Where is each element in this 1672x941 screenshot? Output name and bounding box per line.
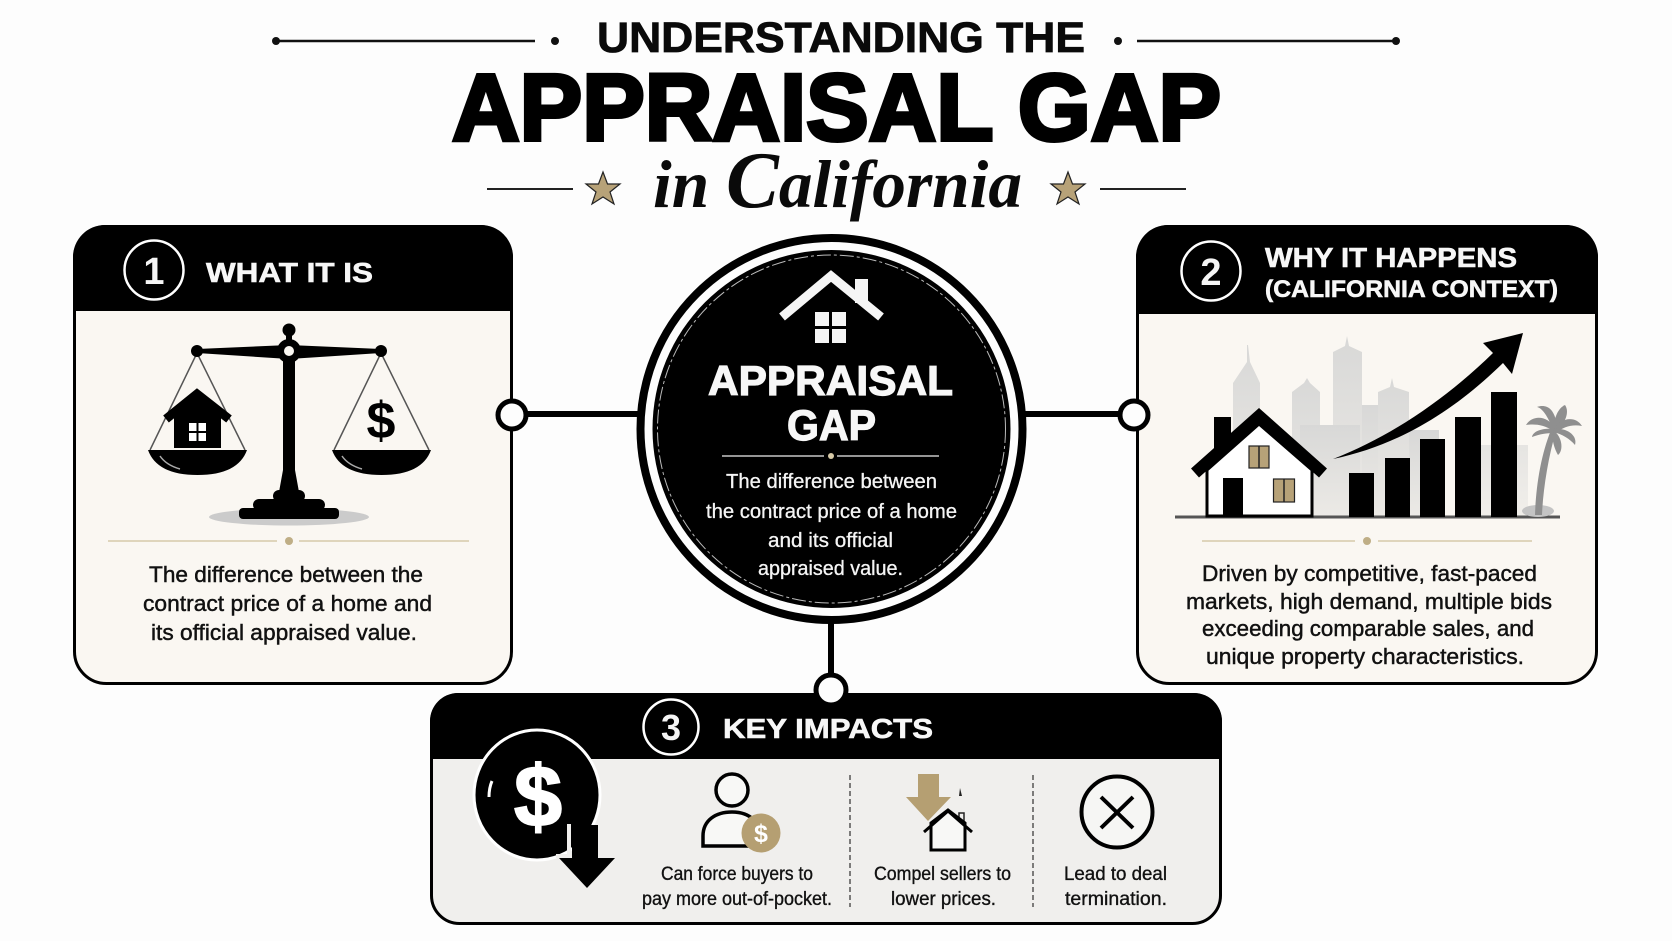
connector node: bottom [816,675,846,705]
dashed separators [850,775,1033,907]
panel: what it is [73,225,526,684]
panel text: contract price of a home and [143,591,432,616]
panel header: WHY IT HAPPENS [1265,242,1517,273]
ground line [1175,516,1560,518]
panel: why it happens [1120,225,1598,684]
impact: sellers lower prices: lower prices. [891,889,996,910]
title block [272,14,1400,225]
panel header: (CALIFORNIA CONTEXT) [1265,276,1558,303]
icon: X in circle [1082,776,1152,848]
icon: down arrow over house [906,774,972,850]
connector node: right [1120,401,1148,429]
subtitle: in California [487,137,1186,225]
connector node: left [498,401,526,429]
bars [1349,392,1517,517]
icon: dollar coin with down arrow: $ [514,749,562,845]
description: the contract price of a home [706,501,957,523]
impact: deal termination: termination. [1065,889,1167,910]
impact: sellers lower prices: Compel sellers to [874,864,1011,885]
house [1195,416,1323,517]
impact: deal termination: Lead to deal [1064,864,1167,885]
center circle: appraisal gap [640,238,1022,620]
icon: house roof [782,276,881,343]
icon: dollar coin with down arrow [474,730,615,888]
impact: buyers pay more: Can force buyers to [661,864,813,885]
arrow [1333,333,1523,459]
panel header: WHAT IT IS [206,257,373,288]
icon: person with coin: $ [754,820,768,848]
panel header: KEY IMPACTS [723,713,933,744]
title line: understanding the [272,14,1400,62]
heading [708,357,953,450]
panel header: 3 [661,707,681,748]
icon: person with coin [703,774,780,852]
panel header [73,225,513,311]
heading: APPRAISAL [708,357,953,404]
description: appraised value. [758,558,903,580]
icon: balance scale with house and dollar [148,324,431,526]
panel text: unique property characteristics. [1206,644,1524,669]
chart: skyline, house, rising bars and arrow [1175,333,1582,517]
skyline [1233,336,1528,517]
title: appraisal gap: APPRAISAL GAP [452,55,1221,161]
title line: understanding the: UNDERSTANDING THE [597,14,1085,62]
heading: GAP [787,402,876,450]
panel text: Driven by competitive, fast-paced [1202,561,1537,586]
description: and its official [768,530,893,552]
panel header [1136,225,1598,314]
description [706,471,957,580]
divider [722,453,939,459]
panel text [1186,561,1552,669]
panel text: exceeding comparable sales, and [1202,616,1534,641]
panel text: The difference between the [149,562,423,587]
panel: key impacts [430,675,1222,924]
description: The difference between [726,471,937,493]
divider [108,537,469,545]
panel header: 1 [143,251,165,293]
impact: deal termination [1064,776,1167,910]
impact: buyers pay more [642,774,832,910]
impact: sellers lower prices [874,774,1011,910]
divider [1202,537,1532,545]
panel text: markets, high demand, multiple bids [1186,589,1552,614]
icon: balance scale with house and dollar: $ [367,392,396,450]
panel text: its official appraised value. [151,620,417,645]
panel text [143,562,432,645]
icon: palm tree [1522,405,1582,517]
panel header [430,693,1222,759]
panel header: 2 [1200,252,1222,294]
impact: buyers pay more: pay more out-of-pocket. [642,889,832,910]
connectors between center circle and panels [520,414,1120,680]
subtitle: in California: in California [653,137,1022,225]
